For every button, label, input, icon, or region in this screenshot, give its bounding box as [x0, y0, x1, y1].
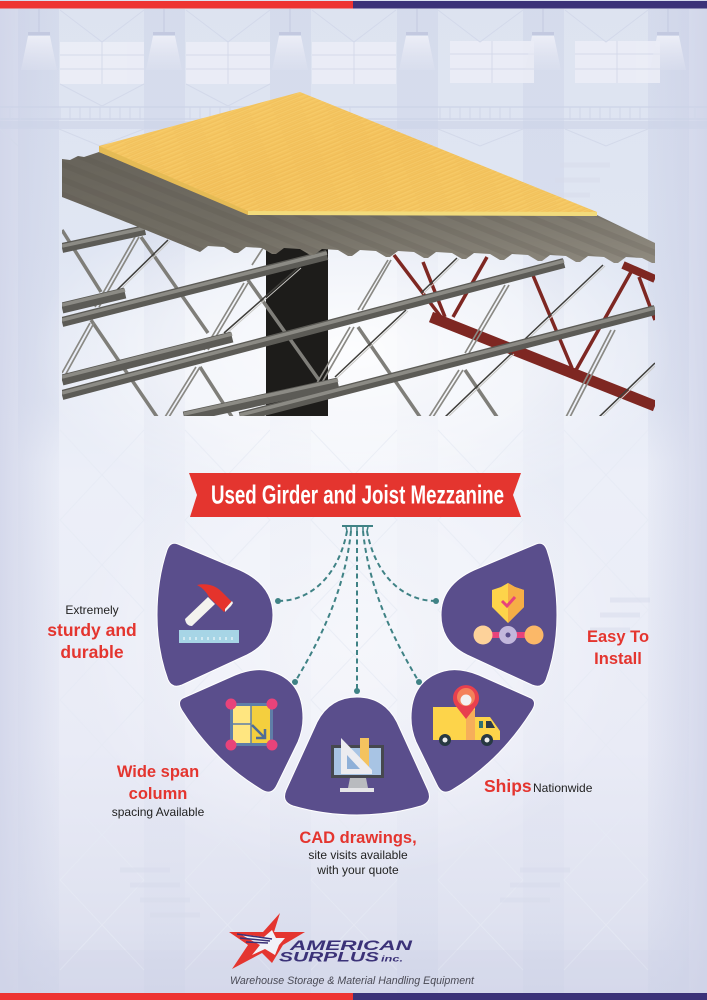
panel: sturdy and durable	[157, 543, 273, 686]
logo: American Surplus: inc.	[381, 954, 403, 964]
label: CAD drawings: with your quote	[316, 863, 399, 877]
corrugated steel deck	[62, 152, 655, 263]
icon: floor plan	[226, 698, 278, 750]
label: wide span column: column	[129, 785, 187, 803]
label: wide span column: Wide span	[117, 763, 199, 781]
label: CAD drawings: CAD drawings,	[299, 829, 417, 847]
top colour bar	[0, 1, 707, 8]
plywood deck board	[99, 92, 597, 216]
title banner: Used Girder and Joist Mezzanine	[211, 480, 504, 510]
icon: shield and connector	[474, 583, 544, 644]
open web members	[62, 230, 655, 418]
label: sturdy and durable	[47, 603, 137, 662]
label: wide span column	[112, 763, 205, 819]
label: ships nationwide	[484, 776, 593, 796]
bottom colour bar	[0, 993, 707, 1000]
logo: American Surplus: SURPLUS	[279, 950, 379, 964]
title banner	[189, 473, 521, 517]
red girder	[394, 255, 655, 406]
panel: CAD drawings	[285, 697, 429, 815]
logo: American Surplus: Warehouse Storage & Material Handling Equipment	[230, 975, 475, 987]
label: easy to install	[587, 628, 649, 668]
joist chords	[62, 230, 655, 417]
logo: American Surplus: AMERICAN	[288, 938, 412, 953]
label: sturdy and durable: sturdy and	[47, 620, 137, 640]
panel: easy to install	[441, 543, 557, 686]
panel: wide span column	[180, 670, 303, 792]
icon: CAD monitor	[331, 738, 384, 792]
label: sturdy and durable: Extremely	[65, 603, 119, 617]
icon: delivery truck with pin	[433, 685, 500, 746]
dashed connectors	[275, 526, 439, 694]
label: wide span column: spacing Available	[112, 805, 205, 819]
mezzanine illustration	[62, 92, 655, 418]
panel: ships nationwide	[411, 670, 534, 792]
label: easy to install: Install	[594, 650, 642, 668]
icon: red star	[229, 913, 305, 969]
label: ships nationwide: Ships	[484, 776, 532, 796]
label: ships nationwide: Nationwide	[533, 781, 593, 795]
icon: hammer and ruler	[179, 584, 239, 643]
label: CAD drawings	[299, 829, 417, 877]
label: CAD drawings: site visits available	[308, 848, 408, 862]
label: sturdy and durable: durable	[60, 642, 124, 662]
steel column	[266, 245, 328, 417]
label: easy to install: Easy To	[587, 628, 649, 646]
logo: American Surplus	[229, 913, 475, 987]
